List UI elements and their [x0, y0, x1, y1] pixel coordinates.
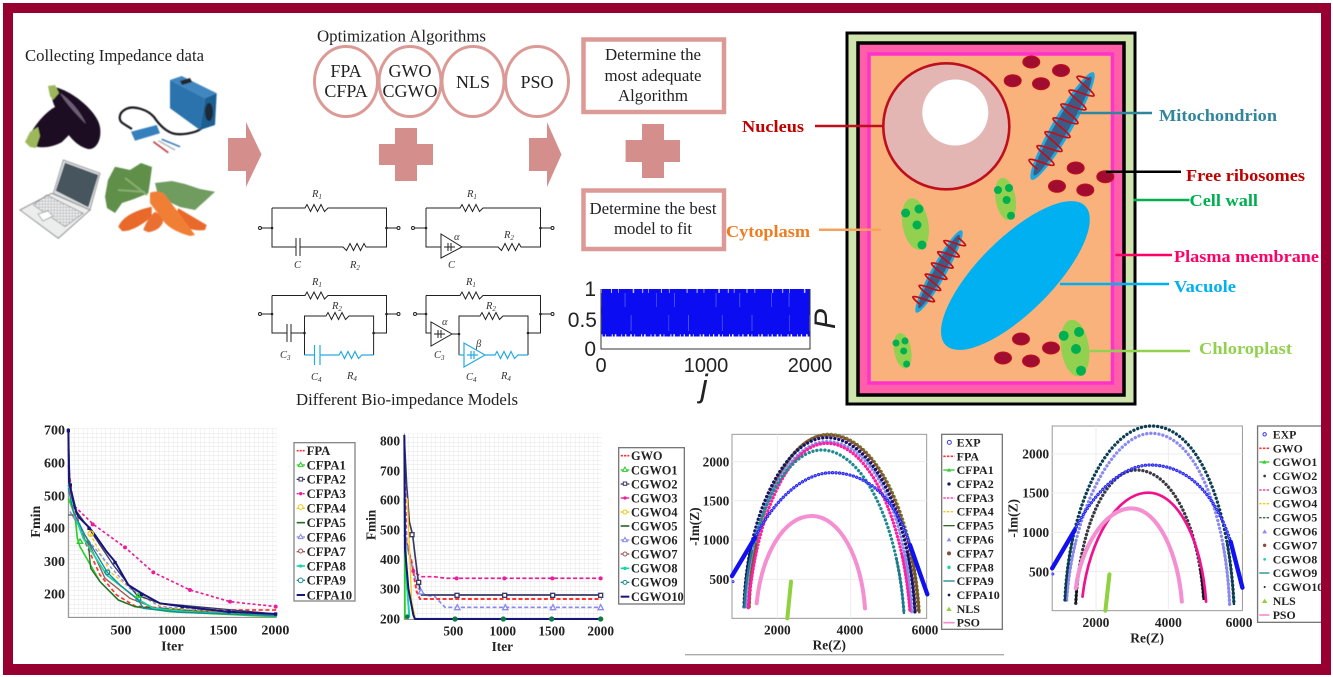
circuit: double RC model: C: [280, 350, 287, 361]
legend: GWO: CGWO6: [631, 533, 678, 547]
circuit: double fractional model: R: [466, 277, 472, 288]
legend: Nyquist GWO family: CGWO1: [1273, 456, 1317, 469]
label: cell wall: [1133, 191, 1258, 210]
legend: Nyquist GWO family: CGWO10: [1273, 581, 1323, 594]
legend: GWO: CGWO1: [631, 463, 678, 477]
chart: Nyquist fit FPA family: 4000: [837, 622, 864, 637]
circuit: double RC model: 2: [338, 305, 342, 313]
legend: FPA: CFPA7: [307, 545, 346, 559]
legend: GWO: GWO: [631, 449, 663, 463]
legend: Nyquist GWO family: EXP: [1273, 428, 1296, 441]
photo: impedance analyzer: [120, 76, 217, 153]
circuit: double RC model: 4: [318, 376, 322, 384]
chart: Nyquist fit FPA family: -Im(Z): [687, 507, 702, 546]
circuit: double fractional model: R: [486, 301, 492, 312]
legend: GWO: CGWO9: [631, 576, 678, 590]
chart: FPA convergence curves: 500: [44, 489, 65, 504]
chart: Nyquist fit FPA family: Re(Z): [813, 638, 846, 653]
chart: FPA convergence curves: 1500: [209, 623, 237, 638]
chart: FPA convergence curves: 700: [44, 423, 65, 438]
algorithm: PSO: PSO: [520, 72, 554, 92]
chart: FPA convergence curves: 2000: [261, 623, 289, 638]
legend: FPA: CFPA1: [307, 458, 346, 472]
heading: collecting impedance data: Collecting Impedance data: [25, 46, 204, 65]
legend: Nyquist FPA family: CFPA9: [957, 574, 994, 588]
nucleus: [883, 63, 1009, 189]
chart: GWO convergence curves: 800: [380, 434, 400, 449]
circuit: fractional CPE model: C: [448, 260, 456, 271]
legend: FPA: CFPA2: [307, 473, 346, 487]
legend: FPA: CFPA6: [307, 530, 346, 544]
legend: Nyquist FPA family: CFPA4: [957, 505, 994, 519]
circuit: double fractional model: 4: [473, 376, 477, 384]
box: determine the most adequate algorithm: most adequate: [604, 66, 702, 85]
box: determine the best model to fit: model to fit: [614, 219, 692, 238]
circuit: double fractional model: R: [501, 371, 507, 382]
label: vacuole: Vacuole: [1174, 277, 1236, 296]
chart: FPA convergence curves: 300: [44, 555, 65, 570]
chart: Nyquist fit GWO family: -Im(Z): [1005, 499, 1021, 538]
label: nucleus: Nucleus: [742, 117, 804, 136]
label: cytoplasm: Cytoplasm: [726, 222, 810, 241]
chart: FPA convergence curves: [29, 423, 355, 654]
chart: GWO convergence curves: 500: [380, 523, 400, 538]
plus sign: algorithm and model: [626, 124, 680, 178]
chloroplast lower left: [891, 331, 914, 370]
ribosomes: [994, 56, 1114, 367]
circuit: double RC model: R: [312, 277, 318, 288]
circuit: simple RC model: C: [294, 260, 302, 271]
vacuole: [920, 180, 1111, 371]
chart: chaotic map P versus j: 0: [584, 338, 596, 361]
chart: chaotic map P versus j: 2000: [788, 355, 832, 377]
legend: Nyquist FPA family: CFPA7: [957, 546, 994, 560]
legend: Nyquist GWO family: CGWO4: [1273, 498, 1317, 511]
label: mitochondrion: Mitochondrion: [1159, 106, 1278, 125]
legend: FPA: CFPA10: [307, 588, 352, 602]
chart: FPA convergence curves: 600: [44, 457, 65, 472]
legend: Nyquist FPA family: EXP: [957, 435, 981, 449]
chart: GWO convergence curves: 500: [443, 624, 464, 639]
chart: GWO convergence curves: 400: [380, 552, 400, 567]
chart: FPA convergence curves: 1000: [158, 623, 186, 638]
box: determine the best model to fit: [584, 190, 724, 249]
circuit: double RC model: R: [332, 301, 338, 312]
chart: GWO convergence curves: [363, 433, 684, 654]
legend: FPA: CFPA5: [307, 516, 346, 530]
legend: Nyquist FPA family: NLS: [957, 602, 980, 616]
legend: Nyquist GWO family: CGWO9: [1273, 567, 1317, 580]
chart: chaotic map P versus j: 1: [584, 278, 596, 301]
chloroplast upper: [992, 176, 1019, 222]
circuit: double fractional model: 4: [507, 375, 511, 383]
legend: Nyquist FPA family: CFPA6: [957, 532, 994, 546]
chart: Nyquist fit GWO family: 500: [1029, 564, 1049, 579]
circuit: fractional CPE model: 2: [510, 234, 514, 242]
algorithm: GWO and CGWO: [379, 46, 441, 116]
plus sign: algorithms and models: [379, 128, 433, 181]
legend: Nyquist GWO family: PSO: [1273, 609, 1296, 622]
legend: GWO: CGWO10: [631, 590, 684, 604]
circuit: double RC model: R: [347, 371, 353, 382]
box: determine the most adequate algorithm: Algorithm: [618, 86, 688, 105]
algorithm: FPA and CFPA: CFPA: [324, 81, 368, 101]
label: cell wall: Cell wall: [1190, 191, 1258, 210]
circuit: double fractional model: α: [442, 317, 448, 328]
algorithm: FPA and CFPA: [314, 46, 378, 116]
algorithm: NLS: NLS: [456, 72, 490, 92]
chart: Nyquist fit FPA family: 2000: [764, 622, 791, 637]
cytoplasm: [869, 54, 1112, 383]
legend: FPA: CFPA8: [307, 559, 346, 573]
circuit: double fractional model: 2: [492, 305, 496, 313]
legend: Nyquist GWO family: NLS: [1273, 595, 1296, 608]
chart: Nyquist fit FPA family: [685, 434, 1004, 655]
chart: Nyquist fit FPA family: 500: [709, 572, 730, 587]
circuit: simple RC model: R: [312, 189, 318, 200]
circuit: double RC model: 1: [318, 281, 322, 289]
chart: Nyquist fit GWO family: [1005, 426, 1325, 645]
chart: GWO convergence curves: Fmin: [363, 509, 378, 540]
photo: eggplants: [25, 85, 100, 149]
legend: Nyquist GWO family: CGWO5: [1273, 512, 1317, 525]
chart: chaotic map P versus j: 0: [595, 355, 607, 377]
circuit: double RC model: C: [311, 372, 318, 383]
chart: chaotic map P versus j: 0.5: [568, 309, 597, 332]
photo: carrots: [105, 163, 215, 236]
heading: optimization algorithms: Optimization Algorithms: [317, 26, 486, 46]
chart: chaotic map P versus j: j: [696, 368, 708, 404]
chart: GWO convergence curves: 1000: [489, 624, 516, 639]
label: free ribosomes: Free ribosomes: [1186, 166, 1305, 185]
legend: Nyquist GWO family: CGWO8: [1273, 553, 1317, 566]
circuit: double fractional model: C: [434, 350, 441, 361]
chart: GWO convergence curves: 600: [380, 493, 400, 508]
legend: GWO: CGWO5: [631, 519, 678, 533]
diagram: plant cell: [847, 33, 1135, 404]
legend: FPA: CFPA9: [307, 574, 346, 588]
caption: different bio-impedance models: Different Bio-impedance Models: [296, 390, 518, 409]
chart: Nyquist fit GWO family: 6000: [1226, 615, 1253, 630]
circuit: double RC model: 3: [286, 354, 291, 362]
legend: Nyquist FPA family: FPA: [957, 449, 979, 463]
legend: GWO: CGWO4: [631, 505, 678, 519]
chart: GWO convergence curves: Iter: [492, 639, 513, 654]
legend: FPA: FPA: [307, 444, 331, 458]
chart: Nyquist fit GWO family: 1500: [1022, 486, 1049, 501]
circuit: simple RC model: R: [350, 260, 356, 271]
chloroplast left: [898, 196, 933, 252]
box: determine the most adequate algorithm: [584, 40, 724, 112]
legend: Nyquist FPA family: [942, 434, 1002, 630]
chart: chaotic map P versus j: [568, 278, 842, 404]
mitochondrion upper: [1021, 66, 1104, 186]
legend: GWO: CGWO3: [631, 491, 678, 505]
algorithm: GWO and CGWO: CGWO: [382, 81, 438, 101]
circuit: fractional CPE model: 1: [473, 193, 477, 201]
legend: GWO: CGWO8: [631, 562, 678, 576]
legend: FPA: [294, 443, 355, 602]
chart: GWO convergence curves: 300: [380, 582, 400, 597]
label: plasma membrane: Plasma membrane: [1174, 247, 1319, 266]
legend: Nyquist FPA family: CFPA5: [957, 519, 994, 533]
box: determine the most adequate algorithm: Determine the: [605, 45, 701, 64]
circuit: fractional CPE model: R: [467, 189, 473, 200]
legend: GWO: CGWO2: [631, 477, 678, 491]
chart: Nyquist fit FPA family: 2000: [703, 454, 730, 469]
circuit: fractional CPE model: R: [504, 230, 510, 241]
chart: Nyquist fit GWO family: Re(Z): [1130, 630, 1164, 645]
chart: Nyquist fit GWO family: 4000: [1155, 615, 1182, 630]
chloroplast lower right: [1057, 318, 1093, 378]
circuit: simple RC model: 1: [318, 193, 322, 201]
legend: Nyquist GWO family: CGWO3: [1273, 484, 1317, 497]
cell wall: [847, 33, 1135, 404]
legend: Nyquist FPA family: CFPA10: [957, 588, 1000, 602]
legend: Nyquist GWO family: CGWO2: [1273, 470, 1317, 483]
legend: Nyquist GWO family: CGWO6: [1273, 526, 1317, 539]
chart: Nyquist fit FPA family: 1500: [703, 493, 730, 508]
chart: GWO convergence curves: 200: [380, 612, 400, 627]
circuit: double RC model: 4: [353, 375, 357, 383]
circuit: double fractional model: β: [475, 339, 482, 350]
algorithm: PSO: [506, 46, 568, 116]
chart: Nyquist fit FPA family: 1000: [703, 533, 730, 548]
legend: Nyquist FPA family: PSO: [957, 616, 980, 630]
chart: GWO convergence curves: 2000: [587, 624, 614, 639]
legend: Nyquist GWO family: CGWO7: [1273, 539, 1317, 552]
legend: Nyquist FPA family: CFPA3: [957, 491, 994, 505]
chart: Nyquist fit GWO family: 2000: [1083, 615, 1110, 630]
chart: chaotic map P versus j: P: [809, 309, 842, 329]
circuit: double fractional model: [414, 277, 554, 384]
legend: Nyquist FPA family: CFPA8: [957, 560, 994, 574]
legend: FPA: CFPA3: [307, 487, 346, 501]
legend: Nyquist FPA family: CFPA2: [957, 477, 994, 491]
chart: FPA convergence curves: 500: [111, 623, 131, 638]
label: chloroplast: Chloroplast: [1199, 339, 1292, 358]
chart: GWO convergence curves: 1500: [538, 624, 565, 639]
arrow: step one to step two: [228, 122, 262, 187]
circuit: double RC model: [258, 277, 400, 384]
circuit: double fractional model: C: [466, 372, 473, 383]
algorithm: FPA and CFPA: FPA: [330, 61, 362, 81]
legend: Nyquist FPA family: CFPA1: [957, 463, 994, 477]
chart: Nyquist fit GWO family: 1000: [1022, 525, 1049, 540]
circuit: double fractional model: 1: [472, 281, 476, 289]
circuit: fractional CPE model: α: [454, 232, 460, 243]
chart: Nyquist fit GWO family: 2000: [1022, 447, 1049, 462]
legend: GWO: CGWO7: [631, 547, 678, 561]
legend: Nyquist GWO family: GWO: [1273, 442, 1303, 455]
circuit: fractional CPE model: [412, 189, 554, 271]
chart: Nyquist fit FPA family: 6000: [912, 622, 939, 637]
circuit: simple RC model: 2: [356, 264, 360, 272]
box: determine the best model to fit: Determine the best: [590, 199, 717, 218]
chart: FPA convergence curves: Iter: [161, 639, 184, 654]
circuit: simple RC model: [258, 189, 400, 272]
chart: FPA convergence curves: 200: [44, 587, 65, 602]
algorithm: GWO and CGWO: GWO: [388, 61, 432, 81]
algorithm: NLS: [442, 46, 504, 116]
photo: laptop: [20, 160, 100, 238]
plasma membrane: [858, 43, 1124, 395]
circuit: double fractional model: 3: [440, 354, 445, 362]
chart: GWO convergence curves: 700: [380, 463, 400, 478]
chart: FPA convergence curves: 400: [44, 522, 65, 537]
arrow: step two to step three: [529, 122, 562, 187]
legend: GWO: [619, 448, 684, 604]
mitochondrion lower: [907, 225, 971, 318]
legend: FPA: CFPA4: [307, 502, 346, 516]
chart: chaotic map P versus j: 1000: [684, 355, 728, 377]
chart: FPA convergence curves: Fmin: [29, 506, 44, 538]
legend: Nyquist GWO family: [1258, 426, 1325, 622]
